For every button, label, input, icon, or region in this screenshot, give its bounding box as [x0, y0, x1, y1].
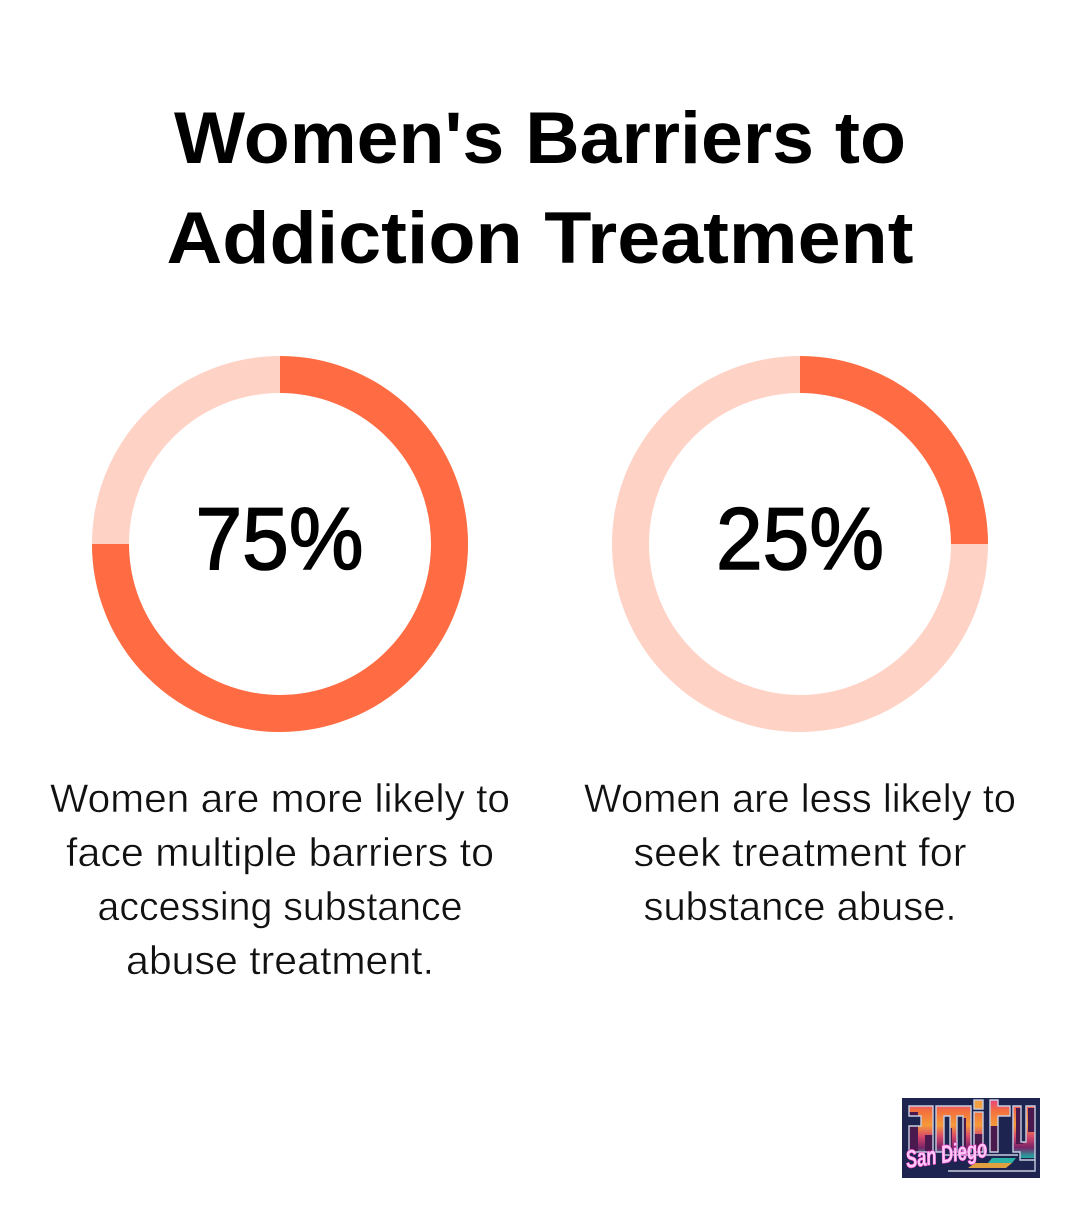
- donut chart: 75%: [110, 374, 450, 714]
- title: Addiction Treatment: [166, 198, 914, 279]
- logo: Amity San Diego: [902, 1098, 1040, 1178]
- caption: 25% statistic: substance abuse.: [644, 885, 956, 929]
- caption: 75% statistic: abuse treatment.: [126, 939, 434, 983]
- caption: 25% statistic: seek treatment for: [634, 831, 966, 875]
- donut chart: 25%: 25%: [716, 489, 884, 588]
- title: [166, 98, 914, 279]
- donut chart: 25%: [630, 374, 970, 714]
- caption: 75% statistic: face multiple barriers to: [66, 831, 494, 875]
- title: Women's Barriers to: [174, 98, 906, 179]
- caption: 25% statistic: [584, 777, 1016, 929]
- caption: 75% statistic: accessing substance: [98, 885, 462, 929]
- logo script text: San Diego: [904, 1135, 989, 1174]
- logo beach stripes: [988, 1158, 1016, 1163]
- caption: 75% statistic: Women are more likely to: [50, 777, 510, 821]
- donut chart: 75%: 75%: [196, 489, 364, 588]
- caption: 75% statistic: [50, 777, 510, 983]
- caption: 25% statistic: Women are less likely to: [584, 777, 1016, 821]
